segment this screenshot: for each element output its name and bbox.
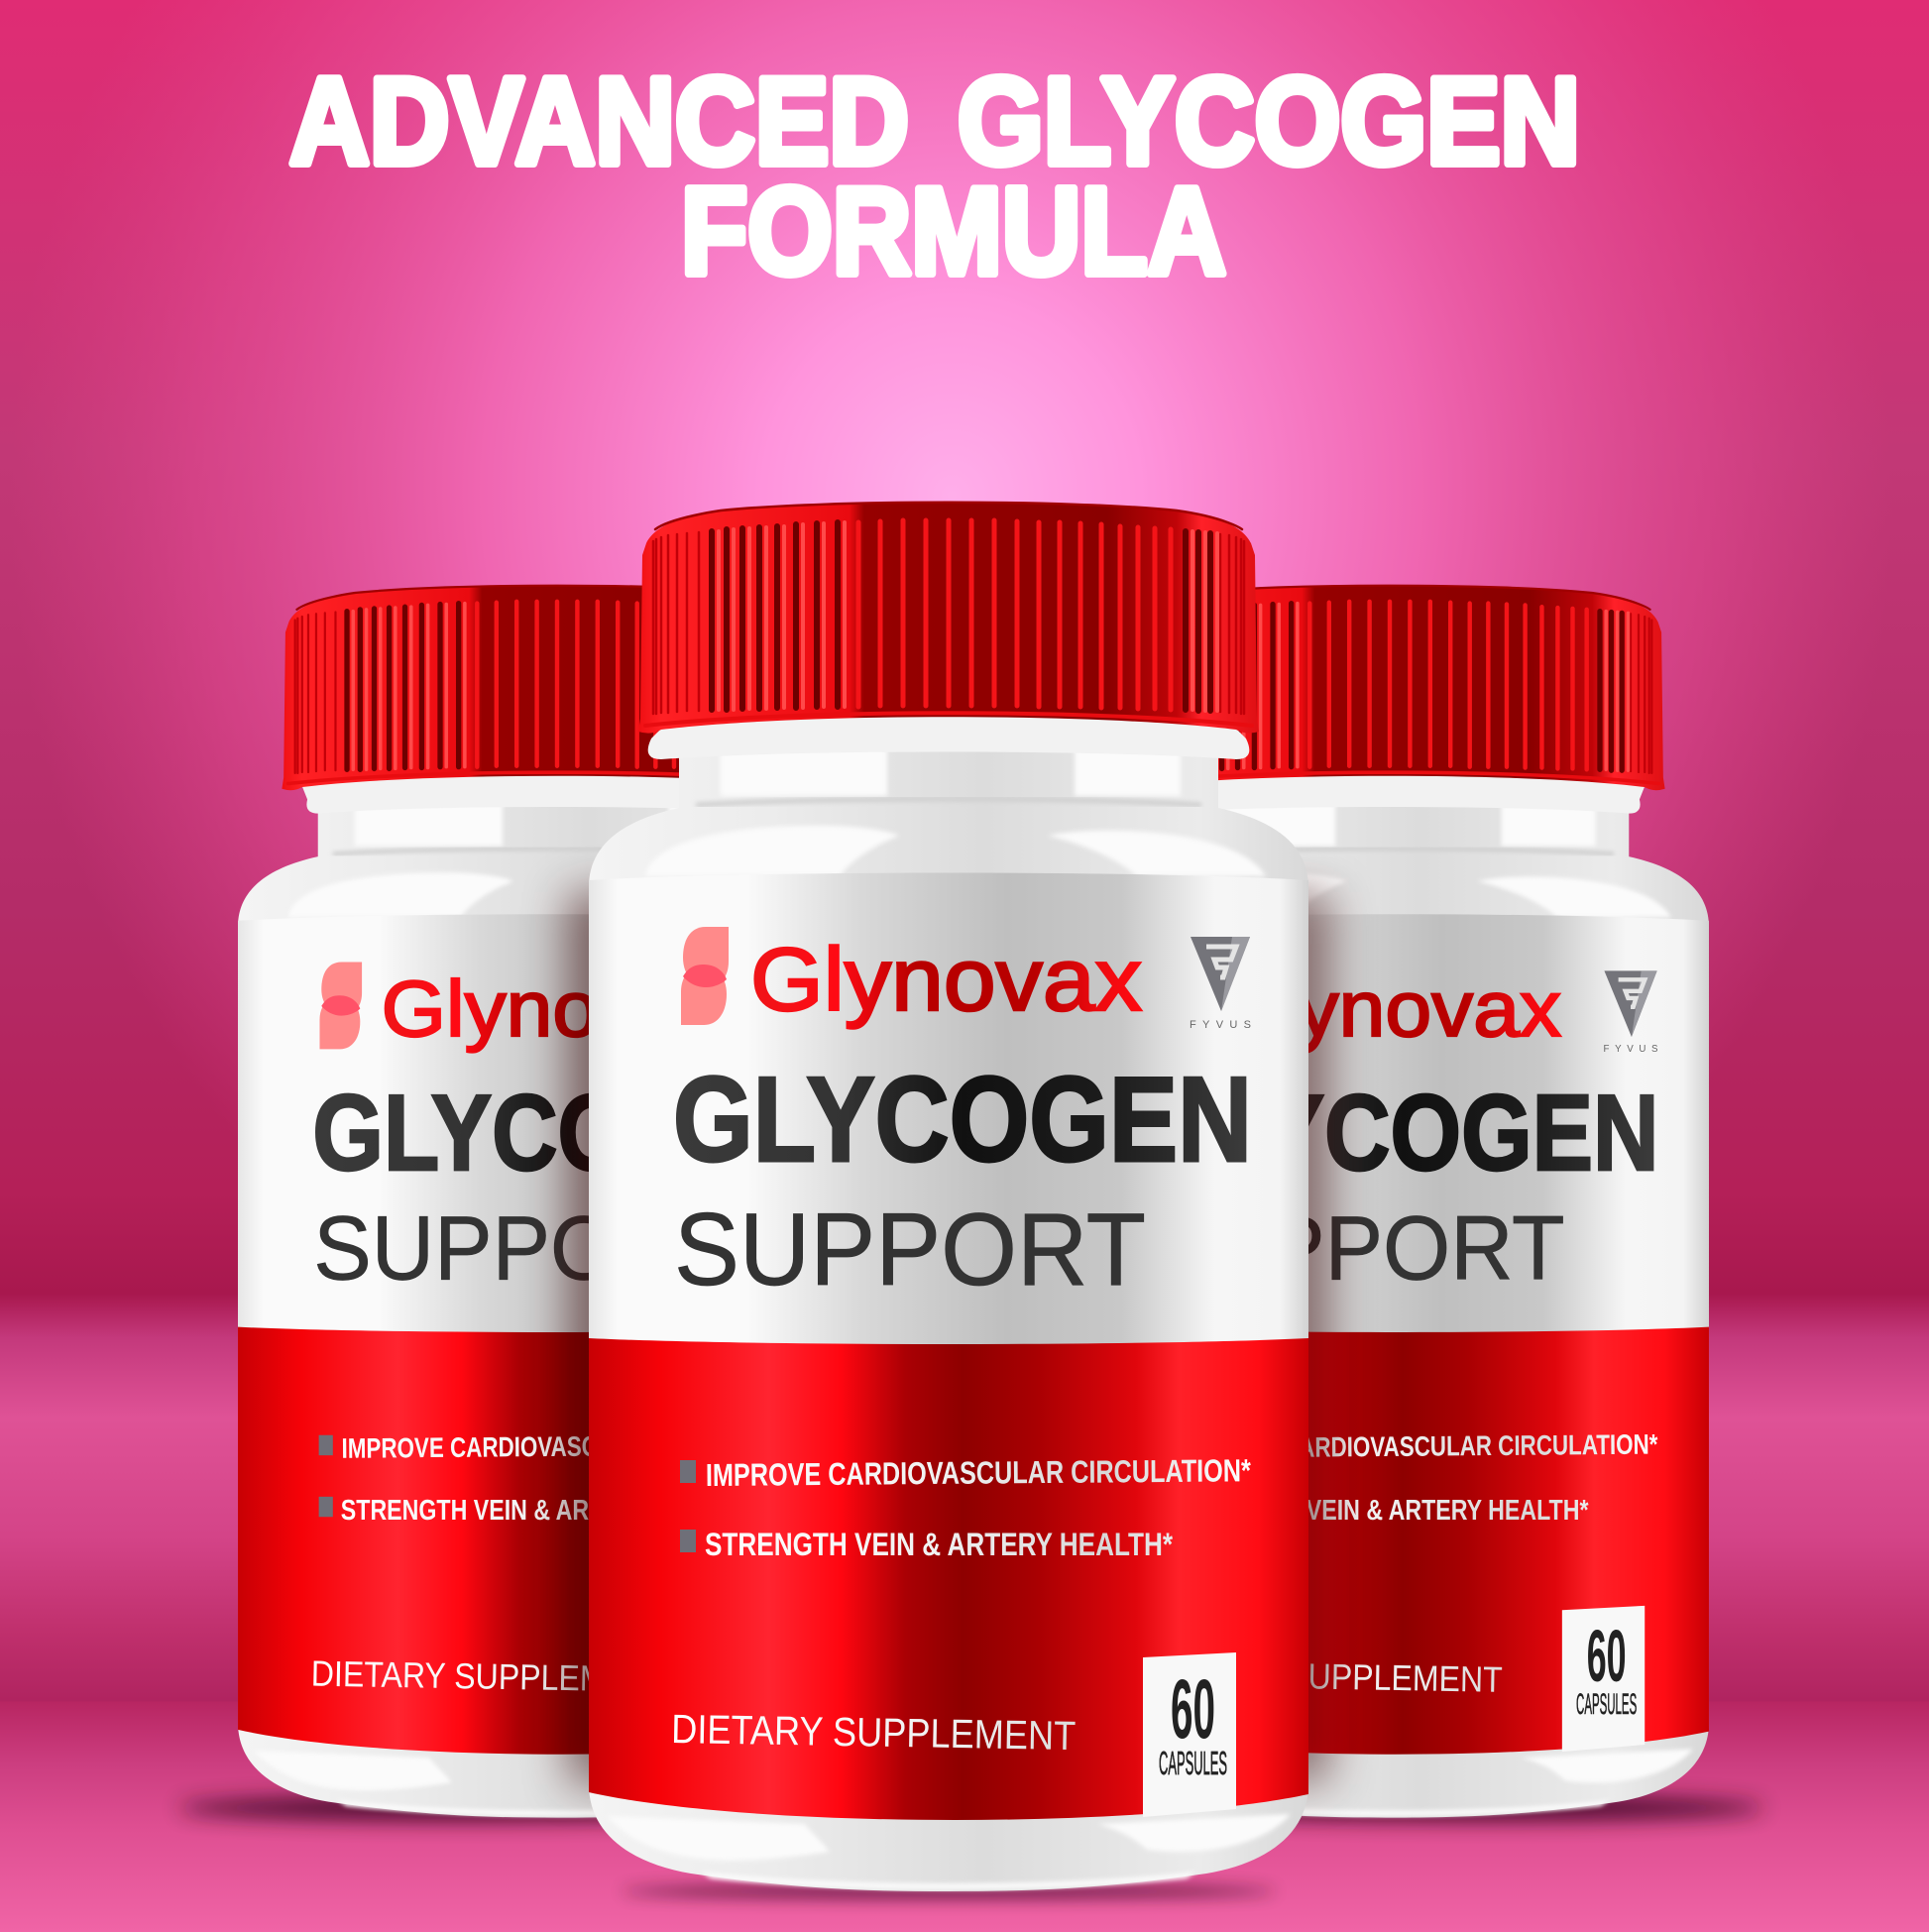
- benefit bullets: STRENGTH VEIN & ARTERY HEALTH*: [705, 1527, 1173, 1562]
- brand logo: [1153, 963, 1194, 1049]
- cap ribs: [645, 503, 1252, 726]
- center bottle cast shadow: [567, 892, 1330, 1784]
- right bottle: CAPSULES: [1576, 1689, 1637, 1721]
- right bottle: [1071, 585, 1709, 1818]
- benefit bullets: [1152, 1429, 1658, 1527]
- shoulder crease: [333, 849, 781, 853]
- bottle body: [589, 739, 1308, 1891]
- maker logo: FYVUS: [1604, 1044, 1658, 1055]
- dietary supplement line: DIETARY SUPPLEMENT: [311, 1653, 670, 1700]
- capsule count box: [730, 1606, 812, 1752]
- floor shadows: [178, 1796, 1764, 1898]
- product subheading: SUPPORT: [1146, 1196, 1565, 1300]
- capsule count box: 60: [754, 1615, 794, 1697]
- center bottle: CAPSULES: [1159, 1745, 1227, 1781]
- capsule count box: 60: [1171, 1662, 1215, 1756]
- product subheading: SUPPORT: [674, 1193, 1146, 1307]
- neck highlights: [355, 798, 763, 846]
- shoulder highlights: [1121, 872, 1671, 917]
- title: [289, 54, 1580, 300]
- shoulder highlights: [288, 872, 839, 917]
- background wall: [0, 0, 1929, 1295]
- capsule count box: 60: [1587, 1615, 1627, 1697]
- benefit bullets: IMPROVE CARDIOVASCULAR CIRCULATION*: [341, 1429, 826, 1465]
- dietary supplement line: DIETARY SUPPLEMENT: [1144, 1653, 1503, 1700]
- product subheading: SUPPORT: [313, 1196, 733, 1300]
- label white area: [238, 914, 876, 1332]
- left bottle: [238, 585, 876, 1818]
- cap: [282, 585, 833, 790]
- background glow: [0, 0, 1929, 1295]
- brand name: Glynovax: [382, 965, 729, 1053]
- center bottle: [589, 502, 1308, 1891]
- cap: [638, 502, 1259, 734]
- shoulder crease: [1166, 849, 1614, 853]
- label white area: [1071, 914, 1709, 1332]
- shoulder highlights: [645, 826, 1266, 876]
- cap ribs: [1121, 586, 1658, 783]
- brand logo: [320, 963, 362, 1049]
- left bottle: CAPSULES: [743, 1689, 804, 1721]
- bottle body: [238, 795, 876, 1818]
- bottle body: [1071, 795, 1709, 1818]
- benefit bullets: [319, 1429, 826, 1527]
- benefit bullets: STRENGTH VEIN & ARTERY HEALTH*: [1174, 1495, 1589, 1527]
- dietary supplement line: DIETARY SUPPLEMENT: [671, 1706, 1077, 1759]
- maker logo: [1604, 970, 1658, 1055]
- product heading: GLYCOGEN: [312, 1073, 826, 1193]
- neck ring: [648, 716, 1249, 759]
- bottom highlights: [254, 1749, 860, 1816]
- title: GLYCOGEN: [958, 54, 1580, 190]
- maker logo: FYVUS: [771, 1044, 826, 1055]
- label red area: [589, 1338, 1308, 1820]
- title: FORMULA: [681, 164, 1226, 300]
- product heading: GLYCOGEN: [673, 1052, 1252, 1187]
- benefit bullets: IMPROVE CARDIOVASCULAR CIRCULATION*: [706, 1452, 1251, 1493]
- brand name: Glynovax: [750, 931, 1142, 1030]
- neck highlights: [1188, 798, 1596, 846]
- label red area: [1071, 1327, 1709, 1755]
- benefit bullets: IMPROVE CARDIOVASCULAR CIRCULATION*: [1174, 1429, 1658, 1465]
- label red area: [238, 1327, 876, 1755]
- label white area: [589, 872, 1308, 1344]
- cap: [1114, 585, 1665, 790]
- brand logo: [681, 927, 729, 1025]
- capsule count box: [1562, 1606, 1645, 1752]
- neck ring: [1135, 775, 1645, 814]
- neck ring: [302, 775, 812, 814]
- bottom highlights: [607, 1814, 1291, 1889]
- floor: [0, 1294, 1929, 1932]
- product heading: GLYCOGEN: [1145, 1073, 1658, 1193]
- bottom highlights: [1086, 1749, 1693, 1816]
- title: ADVANCED: [289, 54, 909, 190]
- maker logo: FYVUS: [1190, 1019, 1251, 1031]
- cap ribs: [288, 586, 826, 783]
- benefit bullets: [680, 1452, 1251, 1562]
- maker logo: [771, 970, 826, 1055]
- brand name: Glynovax: [1214, 965, 1561, 1053]
- maker logo: [1190, 937, 1251, 1031]
- capsule count box: [1143, 1652, 1236, 1817]
- neck highlights: [721, 745, 1181, 796]
- shoulder crease: [696, 799, 1201, 805]
- benefit bullets: STRENGTH VEIN & ARTERY HEALTH*: [341, 1495, 756, 1527]
